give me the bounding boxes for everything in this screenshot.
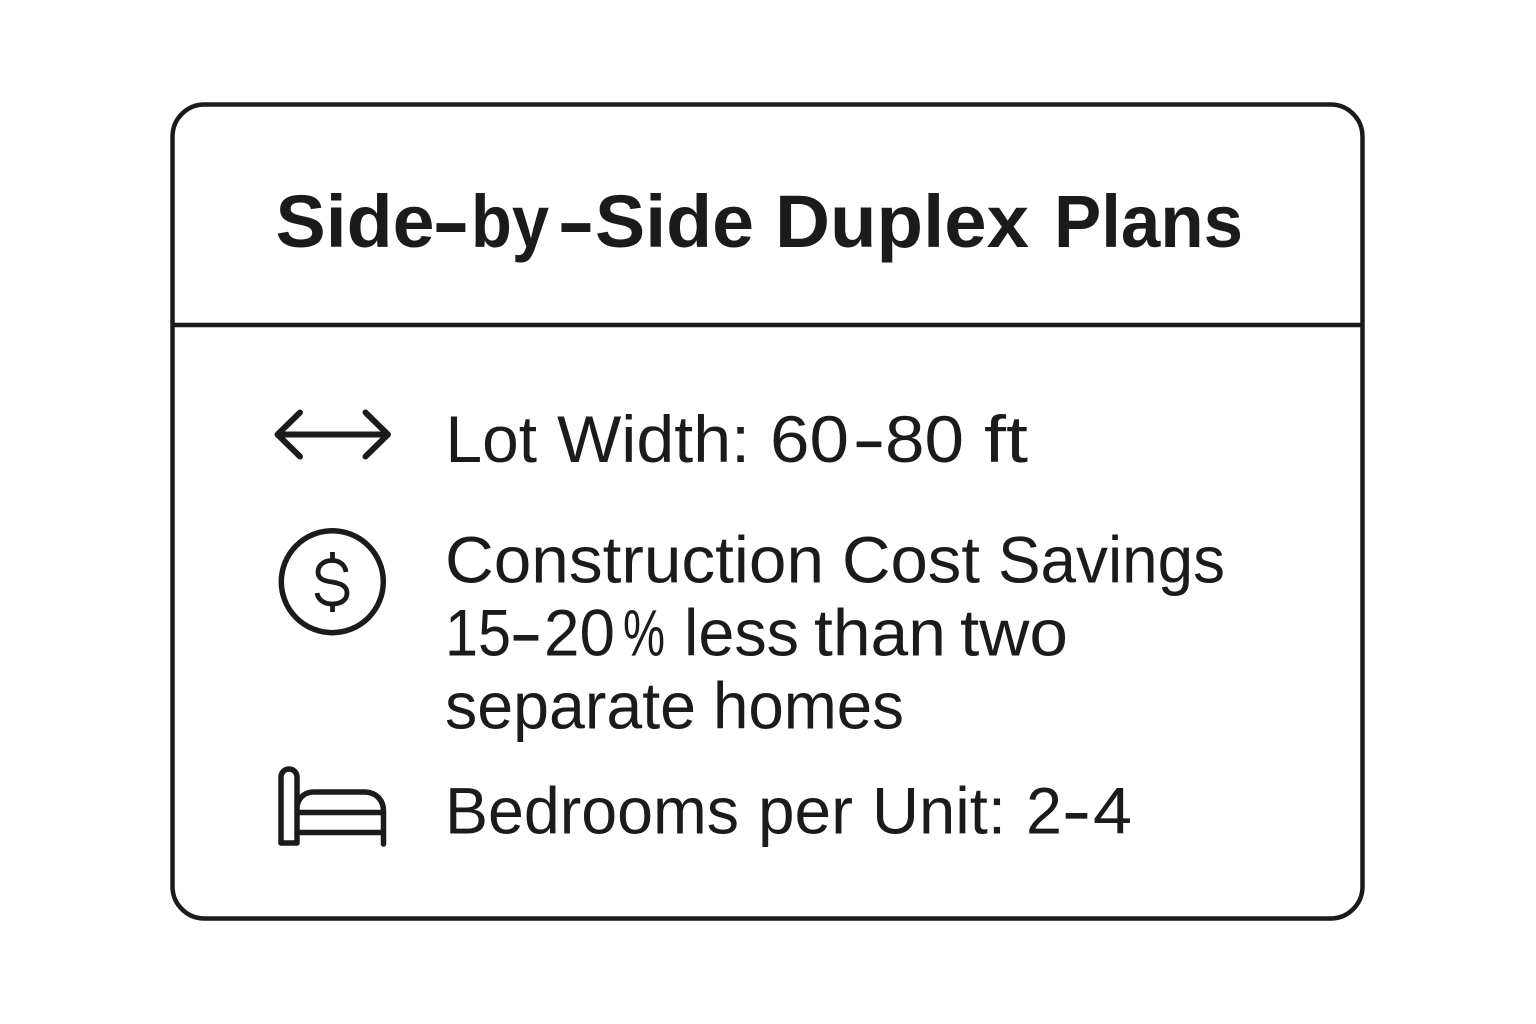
text: construction cost savings: 15 bbox=[445, 596, 511, 670]
icon: dollar circle bbox=[281, 531, 383, 633]
text: lot width: Lot bbox=[446, 402, 537, 476]
title: by bbox=[471, 180, 549, 263]
text: construction cost savings: 20 bbox=[544, 596, 615, 670]
title: Duplex bbox=[775, 180, 1029, 263]
card border bbox=[172, 104, 1362, 918]
text: construction cost savings: two bbox=[960, 596, 1068, 670]
text: bedrooms per unit: 4 bbox=[1093, 774, 1132, 848]
text: lot width: 80 bbox=[885, 402, 964, 476]
text: construction cost savings: less bbox=[684, 596, 799, 670]
text: lot width: – bbox=[857, 401, 881, 475]
title: - bbox=[557, 180, 595, 263]
text: bedrooms per unit: 2 bbox=[1026, 774, 1062, 848]
panel: duplex plan card bbox=[172, 104, 1363, 918]
icon: bed bbox=[281, 769, 384, 844]
text: construction cost savings: separate bbox=[445, 668, 696, 742]
title: Plans bbox=[1054, 180, 1243, 263]
title: Side bbox=[595, 180, 754, 263]
icon: width arrow bbox=[278, 412, 388, 456]
text: lot width: ft bbox=[984, 402, 1028, 476]
text: construction cost savings: homes bbox=[713, 668, 904, 742]
text: construction cost savings: Cost bbox=[842, 522, 980, 596]
text: construction cost savings bbox=[445, 522, 1225, 742]
text: lot width: 60 bbox=[770, 402, 849, 476]
text: construction cost savings: % bbox=[623, 596, 665, 670]
text: lot width: Width: bbox=[557, 402, 750, 476]
text: bedrooms per unit: Unit: bbox=[872, 774, 1006, 848]
text: bedrooms per unit: Bedrooms bbox=[445, 774, 739, 848]
title: Side bbox=[276, 180, 434, 263]
title: - bbox=[432, 180, 470, 263]
text: construction cost savings: – bbox=[514, 594, 538, 668]
text: bedrooms per unit: per bbox=[758, 774, 853, 848]
text: construction cost savings: Savings bbox=[998, 522, 1225, 596]
text: bedrooms per unit: – bbox=[1066, 772, 1087, 846]
text: construction cost savings: Construction bbox=[445, 522, 824, 596]
text: construction cost savings: than bbox=[814, 596, 946, 670]
